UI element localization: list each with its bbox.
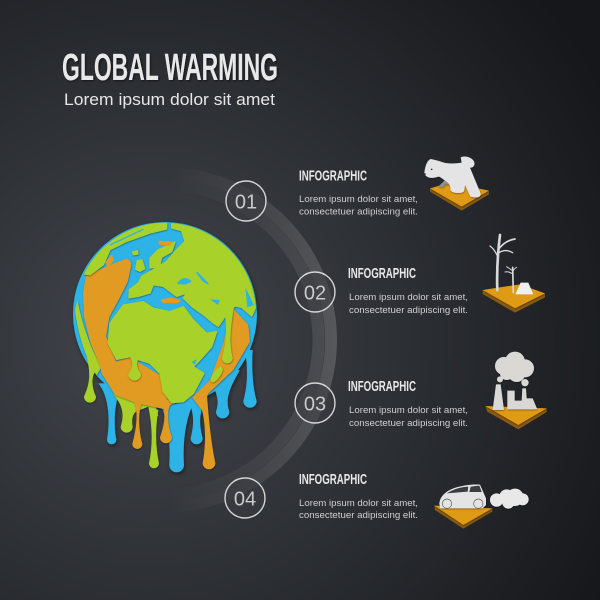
subtitle: Lorem ipsum dolor sit amet [64,90,275,109]
number badge 01 [226,181,266,221]
icon: polar bear [424,156,489,211]
step 01 [226,168,418,221]
text 01: Lorem ipsum dolor sit amet, [299,194,418,205]
orange landmass [84,260,250,469]
curved band [120,173,331,507]
number badge 02 [295,272,335,312]
text 04: Lorem ipsum dolor sit amet, [299,498,418,509]
step 02 [295,266,468,316]
seas and details [105,229,254,365]
text 02: Lorem ipsum dolor sit amet, [349,292,468,303]
step 04 [225,472,418,521]
heading 03: INFOGRAPHIC [348,379,416,395]
icon: dead trees and stump [483,235,545,313]
number badge 04 [225,478,265,518]
text 01: consectetuer adipiscing elit. [299,206,418,218]
text 04: consectetuer adipiscing elit. [299,510,418,521]
text 02: consectetuer adipiscing elit. [349,305,468,316]
step 03 [295,379,468,429]
text 03: consectetuer adipiscing elit. [349,418,468,429]
heading 02: INFOGRAPHIC [348,266,416,282]
icon: factory with smoke [485,352,547,429]
text 02 [349,292,468,316]
title: GLOBAL WARMING [62,47,278,89]
melting globe [73,222,257,472]
text 03: Lorem ipsum dolor sit amet, [349,405,468,416]
number badge 01: 01 [235,192,257,214]
text 01 [299,194,418,218]
number badge 03 [295,383,335,423]
number badge 02: 02 [304,282,326,304]
heading 01: INFOGRAPHIC [299,168,367,184]
text 04 [299,498,418,521]
ocean layer with drips [73,222,257,472]
text 03 [349,405,468,429]
heading 04: INFOGRAPHIC [299,472,367,488]
icon: car and exhaust cloud [434,484,529,529]
green lower drips [75,300,159,468]
number badge 03: 03 [304,394,326,416]
number badge 04: 04 [234,488,256,510]
green continents [85,223,255,403]
